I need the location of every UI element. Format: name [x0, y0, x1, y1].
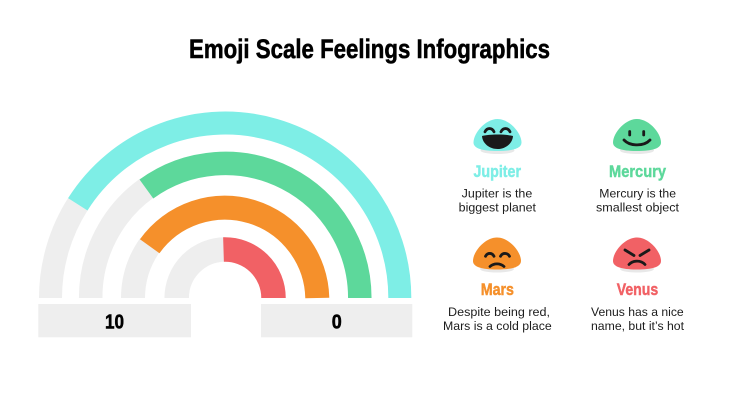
description: Jupiter is the	[462, 186, 532, 200]
red arc	[224, 249, 274, 298]
scale box: 10: 10	[105, 312, 124, 334]
scale box: 0	[261, 304, 412, 337]
gauge chart	[50, 123, 400, 298]
description: Venus has a nice	[591, 305, 684, 319]
icon: smiling emoji	[613, 119, 661, 154]
label: Venus	[617, 280, 658, 299]
icon: sad emoji	[473, 238, 521, 272]
title: Emoji Scale Feelings Infographics	[189, 34, 550, 64]
item: Mars	[443, 238, 552, 333]
icon: laughing emoji	[474, 119, 522, 154]
scale box: 10	[38, 304, 191, 337]
label: Jupiter	[474, 162, 521, 181]
scale box: 0: 0	[332, 312, 342, 334]
item: Mercury: smallest object	[596, 201, 680, 215]
item: Mercury	[596, 119, 680, 215]
track arcs	[50, 188, 225, 298]
cyan arc	[78, 123, 400, 298]
label: Mars	[481, 280, 514, 299]
label: Mercury	[609, 162, 666, 181]
item: Mars: Mars is a cold place	[443, 319, 552, 333]
item: Jupiter	[459, 119, 537, 215]
item: Jupiter: biggest planet	[459, 201, 537, 215]
description: Mercury is the	[599, 186, 676, 200]
green arc	[146, 163, 360, 298]
icon: angry emoji	[613, 238, 661, 272]
item: Venus: name, but it’s hot	[591, 319, 685, 333]
orange arc	[150, 208, 317, 298]
description: Despite being red,	[448, 305, 550, 319]
item: Venus	[591, 238, 685, 333]
